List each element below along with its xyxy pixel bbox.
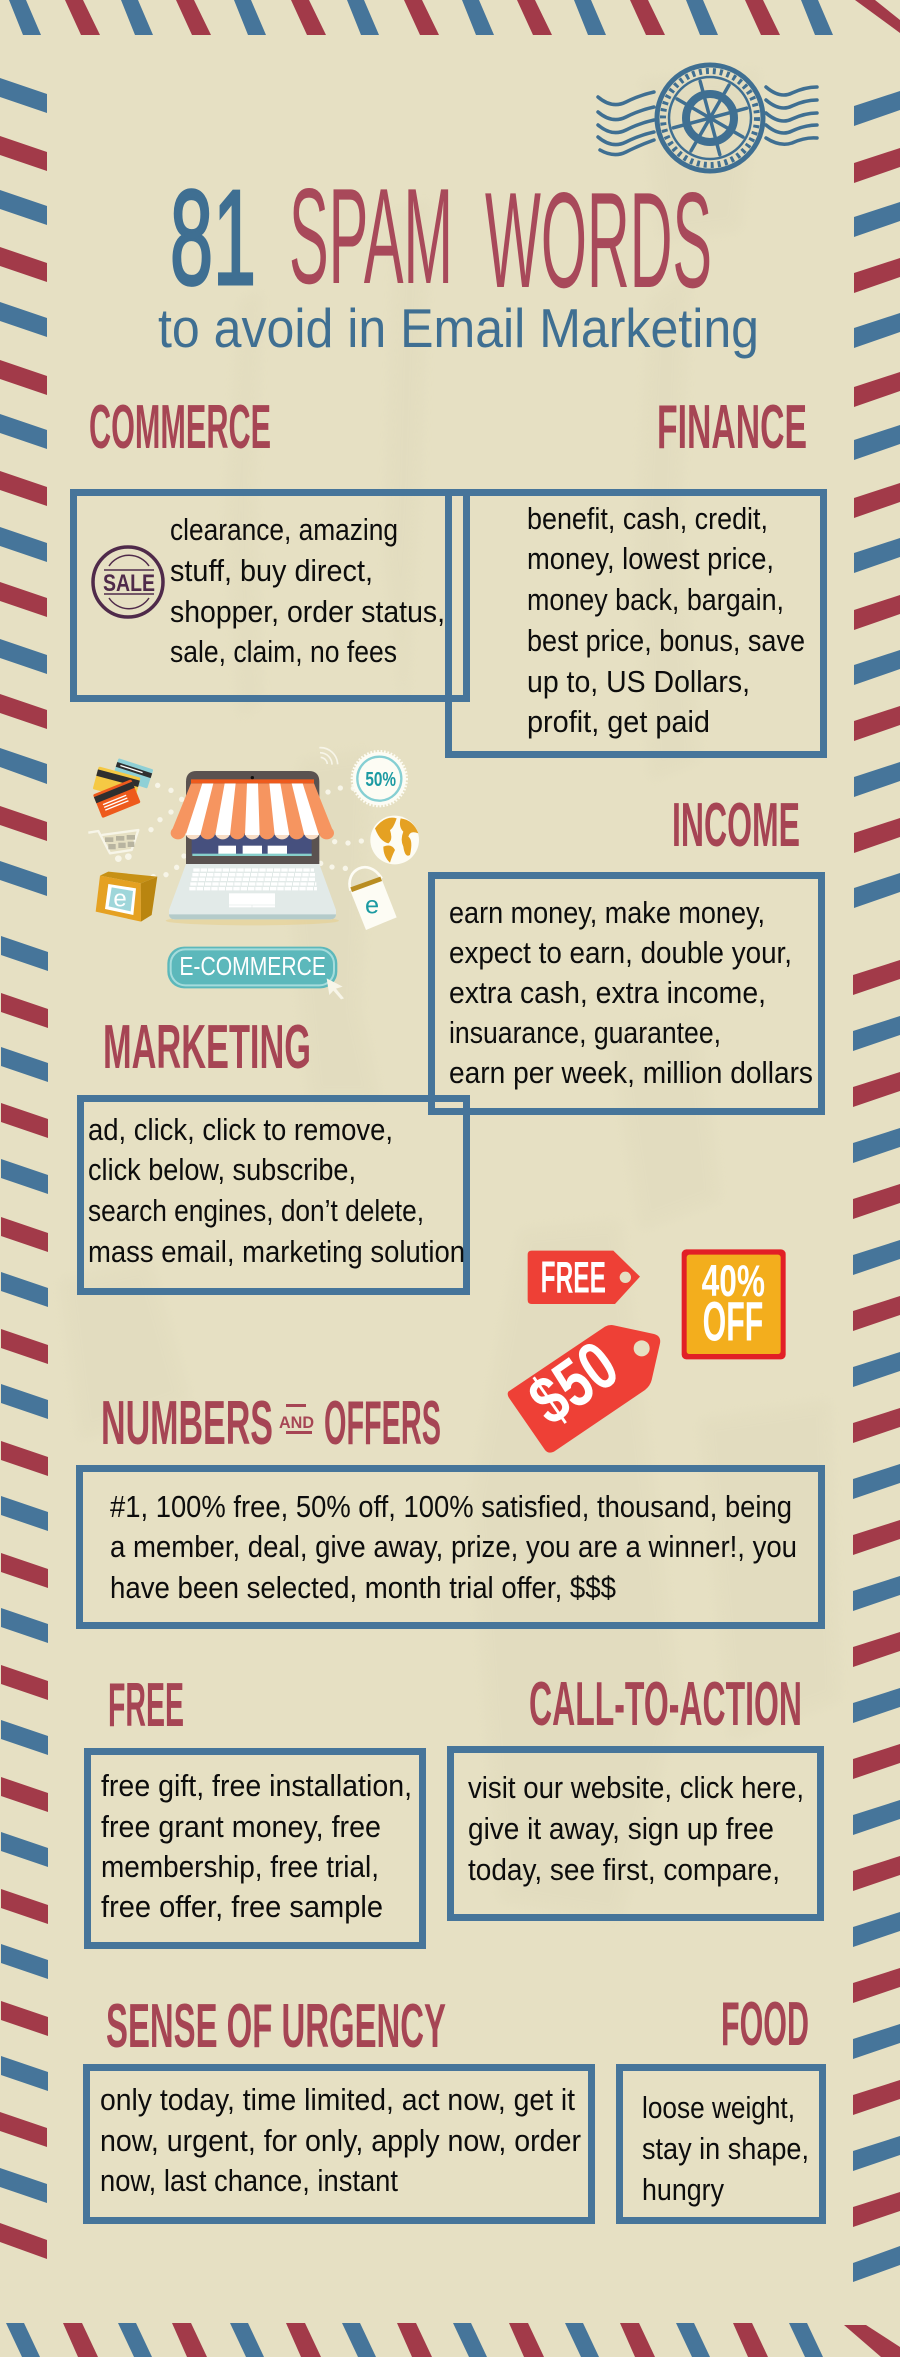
free text: free grant money, free — [101, 1809, 381, 1844]
panel: numbers and offers — [80, 1389, 822, 1626]
heading: sense of urgency: SENSE OF URGENCY — [106, 1992, 446, 2061]
marketing text: search engines, don’t delete, — [88, 1193, 424, 1228]
food text — [642, 2090, 809, 2207]
income text: earn money, make money, — [449, 895, 765, 930]
panel: free — [88, 1671, 422, 1946]
income box — [432, 876, 822, 1112]
subtitle: to avoid in Email Marketing — [158, 297, 759, 359]
call-to-action text: today, see first, compare, — [468, 1852, 780, 1887]
free text: free gift, free installation, — [101, 1768, 412, 1803]
urgency text: only today, time limited, act now, get it — [100, 2082, 575, 2117]
icon: shopping bag — [350, 867, 397, 930]
icon: shopping cart — [88, 830, 138, 862]
panel: commerce — [74, 393, 466, 698]
icon: parcel box — [96, 872, 157, 922]
title: SPAM — [289, 160, 453, 312]
finance text: profit, get paid — [527, 704, 710, 739]
marketing box — [80, 1098, 466, 1292]
commerce box — [74, 492, 466, 698]
free text: membership, free trial, — [101, 1849, 379, 1884]
commerce text — [170, 512, 445, 669]
commerce text: stuff, buy direct, — [170, 553, 373, 588]
laptop — [166, 771, 339, 925]
icon: cursor — [327, 978, 344, 999]
commerce text: sale, claim, no fees — [170, 634, 397, 669]
icon: 40% off badge: OFF — [703, 1290, 763, 1353]
numbers text: have been selected, month trial offer, $$$ — [110, 1570, 616, 1605]
heading: marketing: MARKETING — [103, 1013, 311, 1082]
income text: extra cash, extra income, — [449, 975, 766, 1010]
urgency text — [100, 2082, 581, 2198]
urgency text: now, last chance, instant — [100, 2163, 398, 2198]
finance text — [527, 501, 805, 739]
panel: call-to-action — [450, 1670, 820, 1918]
left airmail stripes — [0, 78, 48, 2259]
food text: hungry — [642, 2172, 724, 2207]
connection dots — [148, 783, 364, 879]
commerce text: shopper, order status, — [170, 594, 445, 629]
urgency box — [86, 2068, 592, 2220]
icon: shopping bag: e — [365, 891, 379, 919]
panel: food: FOOD — [721, 1990, 809, 2059]
food box — [620, 2068, 822, 2220]
panel: numbers and offers: OFFERS — [324, 1389, 441, 1458]
finance text: money, lowest price, — [527, 541, 774, 576]
icon: 40% off badge: 40% — [702, 1257, 765, 1306]
panel: free: FREE — [108, 1671, 184, 1740]
e-commerce button: E-COMMERCE — [179, 951, 326, 981]
income text: earn per week, million dollars — [449, 1055, 813, 1090]
icon: 50% badge — [353, 752, 406, 805]
finance text: best price, bonus, save — [527, 623, 805, 658]
food text: loose weight, — [642, 2090, 795, 2125]
icon: credit cards — [93, 758, 153, 818]
call-to-action text — [468, 1770, 804, 1887]
icon: 50% badge: 50% — [365, 769, 396, 791]
urgency text: now, urgent, for only, apply now, order — [100, 2123, 581, 2158]
numbers box — [80, 1468, 822, 1626]
icon: $50 tag: $50 — [516, 1327, 632, 1440]
commerce text: clearance, amazing — [170, 512, 398, 547]
panel: sense of urgency — [86, 1992, 592, 2220]
title — [158, 160, 759, 359]
icon: 40% off badge — [682, 1249, 786, 1359]
bottom airmail stripes — [6, 2323, 900, 2357]
heading: numbers and offers: AND — [279, 1413, 314, 1432]
icon: wifi signal — [319, 748, 338, 765]
call-to-action box — [450, 1750, 820, 1918]
icon: free tag: FREE — [541, 1253, 606, 1302]
call-to-action text: visit our website, click here, — [468, 1770, 804, 1805]
income text: expect to earn, double your, — [449, 935, 792, 970]
marketing text: mass email, marketing solution — [88, 1234, 465, 1269]
numbers text — [110, 1489, 797, 1605]
income text — [449, 895, 813, 1090]
panel: marketing — [80, 1013, 466, 1292]
icon: sale stamp — [93, 547, 163, 617]
finance box — [448, 492, 824, 754]
numbers text: #1, 100% free, 50% off, 100% satisfied, thousand, being — [110, 1489, 792, 1524]
free text: free offer, free sample — [101, 1889, 383, 1924]
icon: globe — [370, 816, 419, 864]
paper texture — [60, 70, 840, 1920]
panel: income — [432, 791, 822, 1112]
marketing text: ad, click, click to remove, — [88, 1112, 393, 1147]
finance text: benefit, cash, credit, — [527, 501, 768, 536]
free text — [101, 1768, 412, 1924]
heading: numbers and offers: NUMBERS — [101, 1389, 273, 1458]
panel: food — [620, 1990, 822, 2220]
icon: ship wheel postmark stamp — [598, 65, 817, 171]
icon: free tag — [528, 1251, 640, 1304]
panel: finance — [448, 393, 824, 754]
numbers text: a member, deal, give away, prize, you are a winner!, you — [110, 1529, 797, 1564]
title number 81: 81 — [170, 162, 256, 313]
icon: sale stamp: SALE — [103, 570, 155, 597]
top airmail stripes — [9, 0, 900, 35]
e-commerce button — [167, 947, 344, 999]
free box — [88, 1752, 422, 1946]
icon: parcel box: e — [113, 886, 127, 913]
shop awning — [171, 779, 334, 839]
illustration: e-commerce laptop store — [88, 748, 419, 999]
price tags and discount badge — [508, 1249, 786, 1453]
panel: commerce: COMMERCE — [89, 393, 271, 462]
food text: stay in shape, — [642, 2131, 809, 2166]
right airmail stripes — [853, 91, 900, 2282]
call-to-action text: give it away, sign up free — [468, 1811, 774, 1846]
finance text: money back, bargain, — [527, 582, 784, 617]
marketing text — [88, 1112, 465, 1269]
marketing text: click below, subscribe, — [88, 1152, 356, 1187]
income text: insuarance, guarantee, — [449, 1015, 721, 1050]
finance text: up to, US Dollars, — [527, 664, 750, 699]
